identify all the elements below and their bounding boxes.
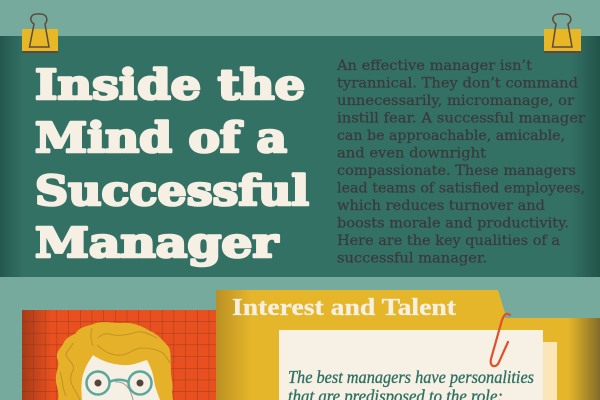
- panel: header band: [0, 36, 600, 277]
- intro text block: unnecessarily, micromanage, or: [337, 93, 575, 109]
- intro text block: compassionate. These managers: [337, 163, 576, 179]
- intro text block: An effective manager isn’t: [336, 58, 533, 74]
- panel: yellow folder: [216, 290, 600, 400]
- icon: paperclip: [491, 314, 510, 366]
- panel: portrait: [22, 310, 218, 400]
- note sheet: [279, 330, 543, 400]
- title: Mind of a: [35, 114, 287, 162]
- icon: right binder clip: [544, 14, 581, 53]
- intro text block: tyrannical. They don’t command: [337, 76, 578, 92]
- intro text block: Here are the key qualities of a: [337, 233, 560, 249]
- face: [81, 355, 160, 400]
- hair: [56, 322, 173, 400]
- back note sheet: [500, 342, 557, 400]
- title: Manager: [35, 219, 280, 267]
- note text: [288, 367, 534, 400]
- eyes: [94, 380, 102, 386]
- icon: left binder clip: [22, 14, 58, 53]
- title: Inside the: [35, 61, 305, 109]
- glasses: [86, 372, 152, 394]
- intro text block: successful manager.: [337, 250, 487, 266]
- heading: Interest and Talent: [232, 295, 456, 321]
- intro text block: and even downright: [337, 146, 487, 162]
- intro text block: which reduces turnover and: [337, 198, 545, 214]
- hair curls: [60, 328, 170, 400]
- intro text block: can be approachable, amicable,: [337, 128, 565, 144]
- title: [35, 61, 309, 267]
- intro text block: lead teams of satisfied employees,: [337, 180, 585, 196]
- nose: [115, 382, 133, 400]
- intro text block: boosts morale and productivity.: [337, 216, 569, 232]
- intro text block: [336, 58, 586, 266]
- intro text block: instill fear. A successful manager: [337, 110, 586, 126]
- title: Successful: [35, 167, 309, 215]
- note text: The best managers have personalities: [288, 367, 534, 387]
